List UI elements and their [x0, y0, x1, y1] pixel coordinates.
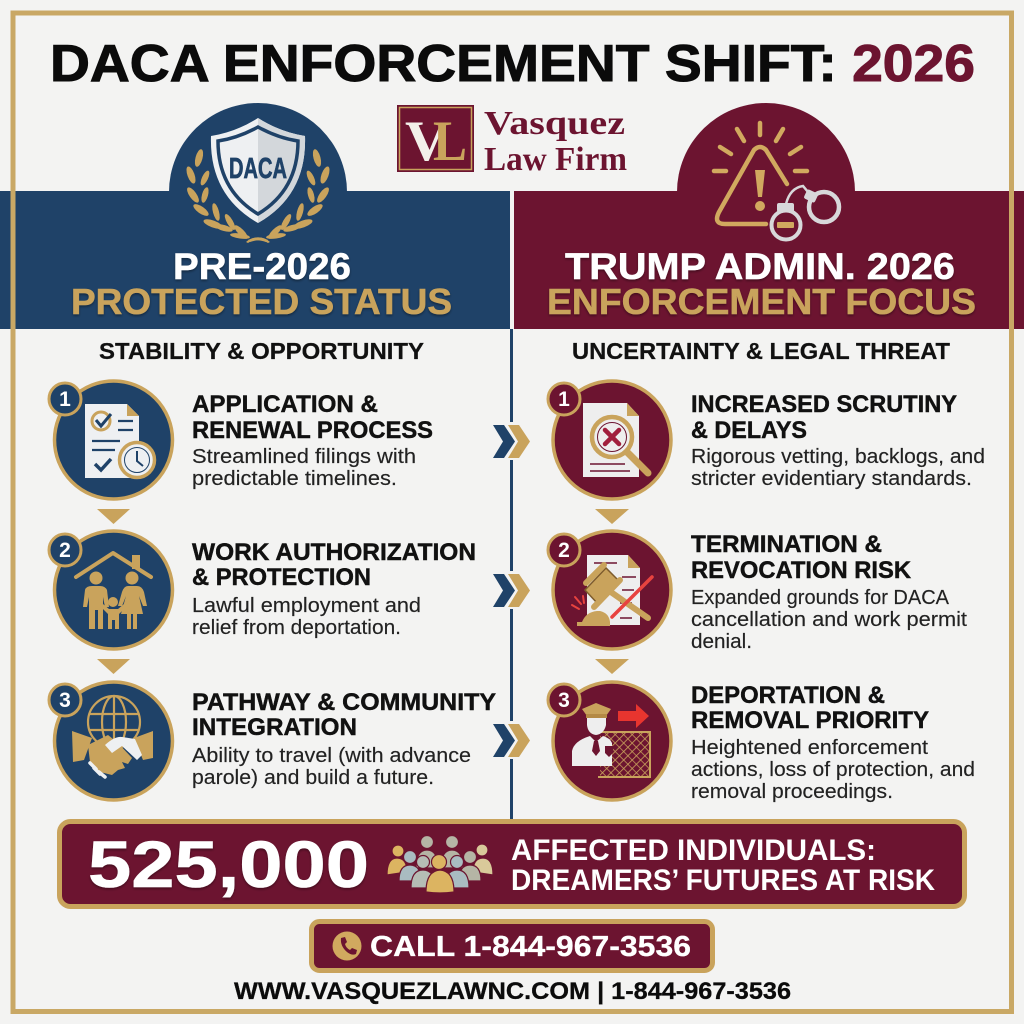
subheading: right: UNCERTAINTY & LEGAL THREAT	[572, 338, 950, 364]
icon: globe and handshake	[54, 682, 172, 800]
subheading: left: STABILITY & OPPORTUNITY	[99, 338, 424, 364]
banner text line 1: AFFECTED INDIVIDUALS:	[511, 834, 876, 867]
step L3: pathway	[49, 682, 496, 800]
logo: Vasquez Law Firm: L	[433, 110, 467, 173]
badge 3: 3	[558, 689, 570, 712]
icon: officer, red arrow and fence	[553, 682, 671, 800]
body text line 2: relief from deportation.	[192, 617, 401, 639]
body text line 2: actions, loss of protection, and	[691, 759, 975, 781]
badge 3	[548, 684, 580, 716]
body text: Expanded grounds for DACA	[691, 587, 950, 609]
heading line 2: RENEWAL PROCESS	[192, 417, 433, 444]
step R3: deportation	[548, 682, 975, 803]
panel header: pre-2026	[0, 103, 510, 329]
badge 1	[548, 383, 580, 415]
call to action button	[312, 922, 712, 970]
heading: PATHWAY & COMMUNITY	[192, 689, 496, 716]
heading: PRE-2026: PRE-2026	[173, 246, 351, 287]
heading line 2: & PROTECTION	[192, 564, 371, 591]
heading: INCREASED SCRUTINY	[691, 391, 957, 418]
footer contact line: WWW.VASQUEZLAWNC.COM | 1-844-967-3536	[234, 978, 791, 1005]
logo: Vasquez Law Firm: Vasquez	[484, 105, 625, 142]
heading line 2: INTEGRATION	[192, 714, 357, 741]
logo: Vasquez Law Firm: Law Firm	[484, 141, 627, 178]
body text: Streamlined filings with	[192, 446, 416, 468]
panel header: 2026 enforcement	[514, 103, 1024, 329]
heading: DEPORTATION &	[691, 682, 885, 709]
icon: family under roof	[54, 531, 172, 649]
icon: document and clock	[54, 381, 172, 499]
chevrons row 3	[493, 724, 530, 757]
heading: ENFORCEMENT FOCUS: ENFORCEMENT FOCUS	[547, 281, 976, 322]
banner text line 2: DREAMERS’ FUTURES AT RISK	[511, 864, 935, 897]
body text line 2: predictable timelines.	[192, 468, 397, 490]
body text line 2: cancellation and work permit	[691, 609, 967, 631]
logo: Vasquez Law Firm: V	[405, 110, 448, 173]
step R1: scrutiny	[548, 381, 985, 499]
body text: Ability to travel (with advance	[192, 745, 471, 767]
icon: DACA shield with laurel wreath: DACA	[229, 153, 287, 185]
body text: Heightened enforcement	[691, 737, 928, 759]
step L2: work authorization	[49, 531, 476, 649]
heading line 2: REMOVAL PRIORITY	[691, 707, 929, 734]
center divider	[510, 329, 513, 820]
body text line 2: stricter evidentiary standards.	[691, 468, 972, 490]
stat number: 525,000	[88, 827, 369, 901]
call text: CALL 1-844-967-3536	[370, 931, 691, 963]
badge 3	[49, 684, 81, 716]
icon: DACA shield with laurel wreath	[185, 118, 331, 243]
heading line 2: & DELAYS	[691, 417, 807, 444]
arrow down R1	[595, 509, 629, 524]
step L1: application	[49, 381, 433, 499]
badge 2: 2	[558, 539, 570, 562]
icon: phone	[332, 932, 362, 960]
title: DACA ENFORCEMENT SHIFT: 2026	[50, 34, 975, 92]
heading line 2: REVOCATION RISK	[691, 557, 912, 584]
heading: PROTECTED STATUS: PROTECTED STATUS	[71, 281, 452, 322]
body text: Rigorous vetting, backlogs, and	[691, 446, 985, 468]
logo: Vasquez Law Firm	[397, 105, 627, 178]
body text: Lawful employment and	[192, 595, 421, 617]
heading: TERMINATION &	[691, 531, 882, 558]
badge 3: 3	[59, 689, 71, 712]
body text line 3: denial.	[691, 631, 752, 653]
heading: APPLICATION &	[192, 391, 378, 418]
arrow down L2	[97, 659, 130, 674]
badge 1: 1	[59, 388, 71, 411]
icon: gavel on document with red slash	[553, 531, 671, 649]
badge 2	[49, 534, 81, 566]
chevrons row 1	[493, 425, 530, 458]
heading: WORK AUTHORIZATION	[192, 539, 476, 566]
banner: 525,000 affected	[60, 822, 964, 906]
body text line 3: removal proceedings.	[691, 781, 893, 803]
arrow down R2	[595, 659, 629, 674]
badge 1	[49, 383, 81, 415]
badge 1: 1	[558, 388, 570, 411]
step R2: termination	[548, 531, 967, 653]
body text line 2: parole) and build a future.	[192, 767, 434, 789]
chevrons row 2	[493, 574, 530, 607]
icon: document with magnifier	[553, 381, 671, 499]
arrow down L1	[97, 509, 130, 524]
badge 2: 2	[59, 539, 71, 562]
icon: crowd of people	[387, 836, 493, 893]
icon: warning triangle and handcuffs	[714, 123, 839, 240]
heading: TRUMP ADMIN. 2026: TRUMP ADMIN. 2026	[565, 246, 955, 287]
badge 2	[548, 534, 580, 566]
